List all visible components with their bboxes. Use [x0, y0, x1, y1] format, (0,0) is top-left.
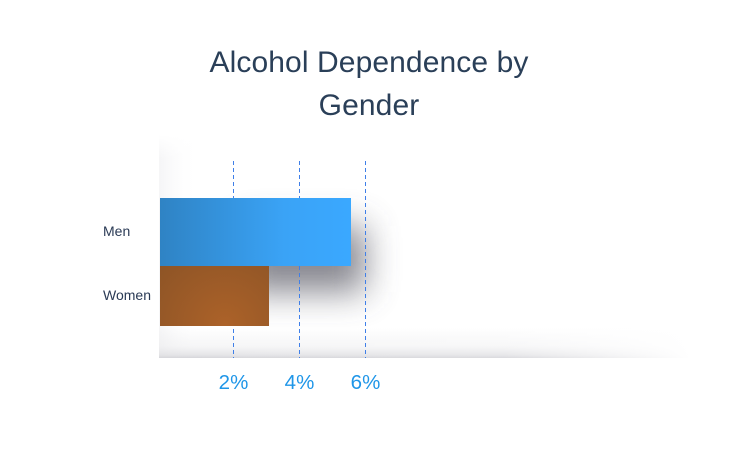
bar shadow — [240, 226, 365, 292]
bar: women — [160, 266, 269, 326]
title — [210, 46, 528, 122]
axis label 2%: 2% — [219, 371, 248, 394]
title: Alcohol Dependence by — [210, 46, 528, 79]
title: Gender — [319, 89, 419, 122]
chart: alcohol dependence by gender — [103, 155, 647, 394]
label: Men: Men — [103, 223, 130, 239]
label: Women: Women — [103, 287, 151, 303]
wall shadow — [159, 135, 199, 358]
axis label 4%: 4% — [285, 371, 314, 394]
floor line — [159, 328, 690, 358]
gridline 2% — [232, 161, 234, 358]
gridline 6% — [364, 161, 366, 358]
gridline 4% — [298, 161, 300, 358]
axis label 6%: 6% — [351, 371, 380, 394]
bar: men — [160, 198, 351, 266]
